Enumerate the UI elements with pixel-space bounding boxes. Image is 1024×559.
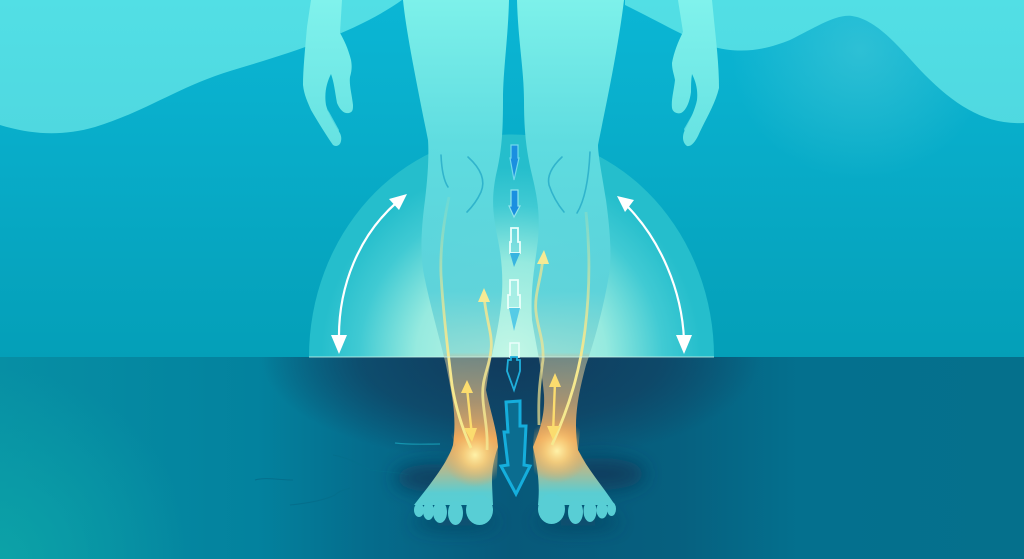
yellow vein arrow: left outer xyxy=(441,197,471,448)
background wave xyxy=(0,0,1024,133)
white curved arrow: right xyxy=(617,196,692,354)
left toes xyxy=(414,495,493,525)
floor xyxy=(0,357,1024,559)
blue down arrow 3 xyxy=(510,228,520,267)
blue down arrow 2 xyxy=(509,190,520,217)
right hand xyxy=(672,0,719,146)
blue down arrow 5 outline xyxy=(507,343,520,390)
background upper wall xyxy=(0,0,1024,358)
yellow vein arrow: right outer xyxy=(552,212,589,445)
blue down arrow 1 xyxy=(510,145,519,180)
ankle glow left xyxy=(444,431,498,486)
yellow double arrow: left ankle xyxy=(461,380,477,442)
yellow double arrow: right ankle xyxy=(547,373,561,440)
left hand xyxy=(303,0,353,146)
white curved arrow: left xyxy=(331,194,407,354)
large blue down arrow xyxy=(501,401,530,494)
right leg and foot xyxy=(517,0,624,524)
yellow arrow: right inner rising xyxy=(536,250,549,425)
left leg and foot xyxy=(403,0,509,525)
blue down arrow 4 xyxy=(508,280,520,331)
yellow arrow: left inner rising xyxy=(478,288,491,450)
right toes xyxy=(538,494,616,524)
floor edge highlight xyxy=(309,356,714,358)
foot shadows on floor xyxy=(395,458,645,529)
glowing dome xyxy=(309,134,714,357)
ankle glow right xyxy=(533,425,586,481)
knee crease lines xyxy=(441,152,590,213)
